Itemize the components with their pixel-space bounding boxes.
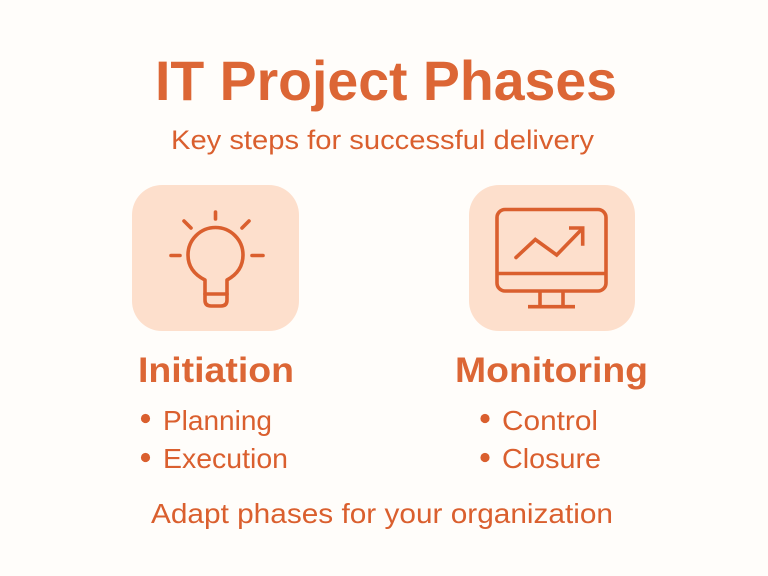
list: initiation steps — [141, 405, 288, 474]
heading: initiation: Initiation — [138, 351, 294, 390]
title: IT Project Phases — [155, 49, 617, 112]
icon: monitor with rising chart — [497, 210, 606, 307]
heading: monitoring: Monitoring — [455, 351, 648, 390]
list: initiation steps: Execution — [163, 443, 288, 474]
panel: monitoring icon — [469, 185, 635, 331]
icon: light bulb — [171, 212, 263, 306]
footer note: Adapt phases for your organization — [151, 498, 613, 529]
list: monitoring steps: Closure — [502, 443, 601, 474]
list: monitoring steps — [480, 405, 601, 474]
subtitle: Key steps for successful delivery — [171, 125, 595, 155]
list: monitoring steps: Control — [502, 405, 598, 436]
list: initiation steps: Planning — [163, 405, 272, 436]
panel: initiation icon — [132, 185, 299, 331]
